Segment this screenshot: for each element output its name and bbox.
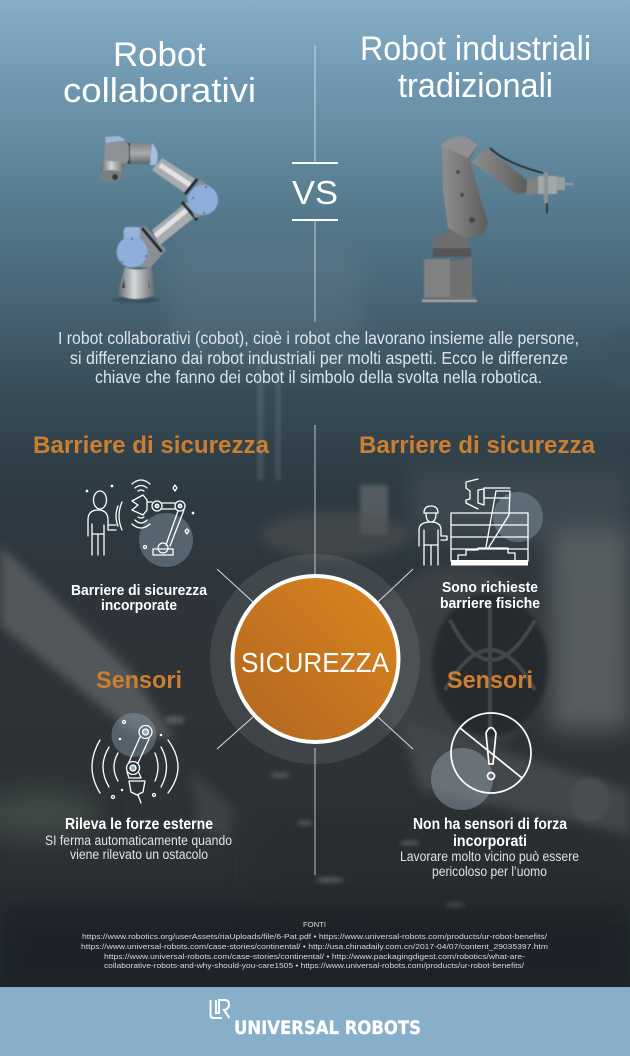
- heading: left sensors: Sensori: [96, 667, 182, 694]
- sources: https://www.robotics.org/userAssets/riaUploads/file/6-Pat.pdf • https://www.universal-robots.com/products/ur-robot-benefits/: [82, 932, 548, 941]
- logo: Universal Robots: UNIVERSAL ROBOTS: [234, 1017, 421, 1039]
- text block: right sensors: incorporati: [453, 833, 527, 850]
- title: collaborative robots: Robot: [113, 36, 207, 74]
- intro paragraph: si differenziano dai robot industriali per molti aspetti. Ecco le differenze: [70, 348, 568, 368]
- panel: left benefit label: incorporate: [101, 597, 177, 614]
- heading: right safety barriers: Barriere di sicurezza: [359, 432, 596, 459]
- sources: https://www.universal-robots.com/case-stories/continental/ • http://usa.chinadaily.com.cn/2017-04/07/content_29035397.htm: [81, 942, 548, 951]
- text block: right sensors: Lavorare molto vicino può essere: [400, 849, 579, 864]
- intro paragraph: [58, 328, 579, 387]
- footer band: [0, 987, 630, 1056]
- central safety badge: SICUREZZA: [241, 647, 389, 678]
- panel: right benefit label: [440, 579, 540, 612]
- panel: left benefit label: Barriere di sicurezza: [71, 582, 208, 599]
- text block: left sensors: viene rilevato un ostacolo: [70, 847, 208, 862]
- VS marker: VS: [292, 174, 338, 211]
- icon: no force sensors warning: [431, 713, 531, 810]
- title: collaborative robots: [63, 36, 256, 110]
- intro paragraph: chiave che fanno dei cobot il simbolo della svolta nella robotica.: [95, 367, 542, 387]
- title: traditional industrial robots: [360, 30, 591, 105]
- icon: worker and physical barrier: [419, 479, 543, 566]
- icon: cobot with built-in barriers: [86, 480, 194, 567]
- text block: right sensors: Non ha sensori di forza: [413, 816, 567, 833]
- text block: left sensors: [45, 816, 232, 862]
- sources: FONTI: [303, 920, 326, 929]
- sources: collaborative-robots-and-why-should-you-care1505 • https://www.universal-robots.com/products/ur-robot-benefits/: [104, 961, 525, 970]
- icon: force sensing arm: [92, 713, 178, 803]
- central vertical divider: [314, 45, 316, 875]
- sources: [81, 920, 548, 970]
- logo: Universal Robots: [210, 1000, 421, 1039]
- heading: left safety barriers: Barriere di sicurezza: [33, 432, 270, 459]
- industrial robot photo illustration: [422, 136, 573, 302]
- text block: left sensors: SI ferma automaticamente quando: [45, 833, 232, 848]
- panel: right benefit label: barriere fisiche: [440, 595, 540, 612]
- central safety badge: [210, 554, 420, 764]
- sources: https://www.universal-robots.com/case-stories/continental/ • http://www.packagingdigest.com/robotics/what-are-: [104, 952, 526, 961]
- text block: right sensors: pericoloso per l’uomo: [432, 864, 547, 879]
- text block: right sensors: [400, 816, 579, 879]
- heading: right sensors: Sensori: [447, 667, 533, 694]
- hub connectors: [217, 569, 413, 749]
- title: traditional industrial robots: Robot industriali: [360, 30, 591, 68]
- title: collaborative robots: collaborativi: [63, 72, 256, 110]
- intro paragraph: I robot collaborativi (cobot), cioè i robot che lavorano insieme alle persone,: [58, 328, 579, 348]
- panel: left benefit label: [71, 582, 208, 614]
- text block: left sensors: Rileva le forze esterne: [65, 816, 213, 833]
- title: traditional industrial robots: tradizionali: [398, 67, 553, 105]
- VS marker: [292, 162, 338, 221]
- cobot photo illustration: [99, 136, 218, 303]
- panel: right benefit label: Sono richieste: [442, 579, 538, 596]
